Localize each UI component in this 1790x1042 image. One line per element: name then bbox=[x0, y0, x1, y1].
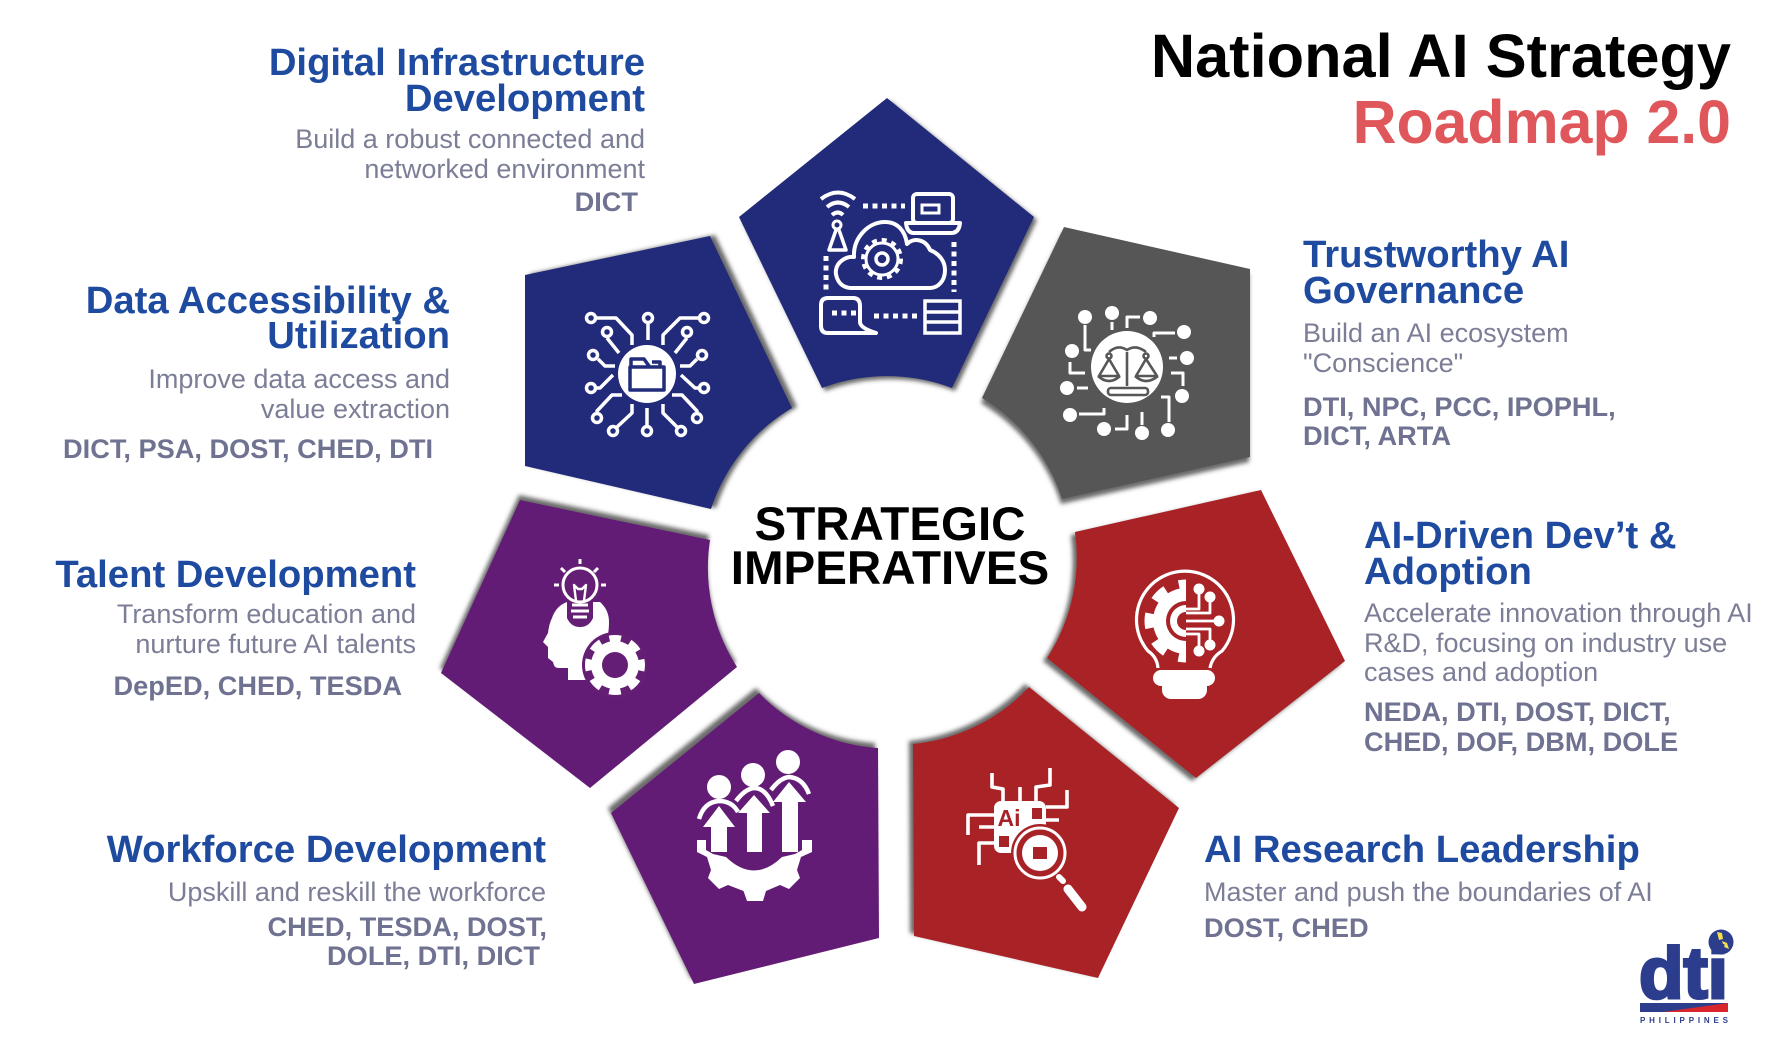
text: AI research leadership: AI Research Leadership bbox=[1204, 828, 1640, 871]
title: Roadmap 2.0 bbox=[1353, 88, 1731, 156]
logo: DTI Philippines: dti bbox=[1639, 934, 1728, 1014]
text: trustworthy AI: Build an AI ecosystem bbox=[1303, 318, 1569, 348]
text: talent development: DepED, CHED, TESDA bbox=[113, 670, 402, 701]
icon: data folder circuit bbox=[586, 314, 708, 436]
text: AI-driven development: AI-Driven Dev’t & bbox=[1364, 514, 1676, 557]
icon: AI chip magnifier bbox=[968, 768, 1082, 907]
text: workforce development: Upskill and reskill the workforce bbox=[168, 877, 546, 907]
icon: AI chip magnifier: Ai bbox=[998, 805, 1020, 831]
pentagon: AI-driven development bbox=[1047, 490, 1345, 778]
text: AI research leadership bbox=[1204, 828, 1653, 943]
text: talent development bbox=[55, 553, 416, 701]
text: AI-driven development: Accelerate innovation through AI bbox=[1364, 598, 1753, 628]
text: AI-driven development: cases and adoption bbox=[1364, 657, 1598, 687]
pentagon: trustworthy AI bbox=[982, 227, 1250, 499]
pentagon: talent bbox=[441, 500, 737, 788]
text: trustworthy AI bbox=[1303, 233, 1616, 451]
text: data accessibility: value extraction bbox=[261, 394, 450, 424]
logo: DTI Philippines: PHILIPPINES bbox=[1640, 1016, 1729, 1025]
text: AI-driven development bbox=[1364, 514, 1753, 757]
text: AI research leadership: DOST, CHED bbox=[1204, 912, 1369, 943]
text: workforce development bbox=[107, 828, 547, 971]
text: talent development: Talent Development bbox=[55, 553, 416, 596]
icon: network cloud bbox=[821, 192, 960, 333]
text: digital infrastructure: Development bbox=[405, 77, 645, 120]
icon: AI ethics scales bbox=[1060, 306, 1194, 440]
text: workforce development: Workforce Development bbox=[107, 828, 546, 871]
text: AI-driven development: NEDA, DTI, DOST, DICT, bbox=[1364, 696, 1671, 727]
text: digital infrastructure: Build a robust connected and bbox=[295, 124, 645, 154]
pentagon: data accessibility bbox=[525, 236, 792, 509]
text: digital infrastructure bbox=[269, 41, 645, 217]
text: workforce development: CHED, TESDA, DOST, bbox=[268, 911, 547, 942]
icon: talent head and gear bbox=[543, 559, 648, 698]
text: AI research leadership: Master and push the boundaries of AI bbox=[1204, 877, 1653, 907]
text: workforce development: DOLE, DTI, DICT bbox=[327, 940, 540, 971]
text: digital infrastructure: DICT bbox=[575, 186, 638, 217]
text: data accessibility bbox=[63, 279, 450, 464]
text: data accessibility: Improve data access and bbox=[148, 364, 450, 394]
center label: IMPERATIVES bbox=[731, 542, 1049, 595]
text: talent development: nurture future AI talents bbox=[135, 629, 416, 659]
text: digital infrastructure: Digital Infrastructure bbox=[269, 41, 645, 84]
pentagon: digital infrastructure bbox=[739, 98, 1034, 388]
text: AI-driven development: CHED, DOF, DBM, DOLE bbox=[1364, 726, 1678, 757]
pentagon: workforce bbox=[611, 693, 879, 984]
center label: STRATEGIC bbox=[755, 498, 1025, 551]
text: data accessibility: DICT, PSA, DOST, CHED, DTI bbox=[63, 433, 433, 464]
text: trustworthy AI: "Conscience" bbox=[1303, 348, 1463, 378]
text: data accessibility: Data Accessibility & bbox=[86, 279, 450, 322]
text: trustworthy AI: DICT, ARTA bbox=[1303, 420, 1451, 451]
text: trustworthy AI: DTI, NPC, PCC, IPOPHL, bbox=[1303, 391, 1616, 422]
text: talent development: Transform education and bbox=[117, 599, 416, 629]
text: digital infrastructure: networked environment bbox=[364, 154, 645, 184]
text: trustworthy AI: Trustworthy AI bbox=[1303, 233, 1569, 276]
icon: innovation bulb bbox=[1137, 571, 1234, 699]
icon: workforce gear bbox=[697, 750, 812, 901]
title bbox=[1151, 22, 1731, 156]
text: data accessibility: Utilization bbox=[267, 314, 450, 357]
title: National AI Strategy bbox=[1151, 22, 1731, 90]
text: AI-driven development: R&D, focusing on industry use bbox=[1364, 628, 1727, 658]
pentagon: AI research bbox=[913, 687, 1179, 978]
text: AI-driven development: Adoption bbox=[1364, 550, 1532, 593]
center label bbox=[731, 498, 1049, 595]
text: trustworthy AI: Governance bbox=[1303, 269, 1524, 312]
